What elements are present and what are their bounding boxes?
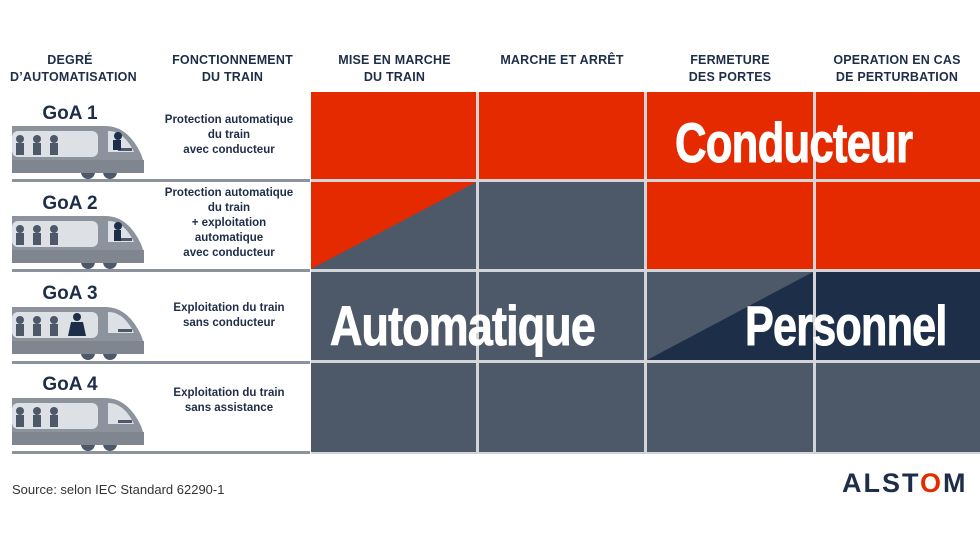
text: Protection automatique <box>165 187 293 199</box>
row separators <box>12 179 310 182</box>
header: operation perturbation <box>833 53 961 84</box>
text: Exploitation du train <box>173 302 285 314</box>
text: sans assistance <box>185 402 273 414</box>
header: marche et arrêt: MARCHE ET ARRÊT <box>500 53 624 67</box>
text: du train <box>208 202 250 214</box>
header: fonctionnement <box>172 53 293 84</box>
text: GoA 2 <box>42 193 98 214</box>
label: Automatique: Automatique <box>330 294 595 357</box>
logo: ALSTOM: ALSTOM <box>842 468 968 498</box>
header: operation perturbation: OPERATION EN CAS <box>833 53 961 67</box>
header: degré d'automatisation: DEGRÉ <box>47 53 93 67</box>
descriptions <box>165 114 293 156</box>
icon: trains <box>12 126 144 451</box>
header: fermeture des portes: DES PORTES <box>689 70 771 84</box>
text: + exploitation <box>192 217 266 229</box>
header: fermeture des portes: FERMETURE <box>690 53 770 67</box>
descriptions: avec conducteur <box>183 144 275 156</box>
header: fonctionnement: DU TRAIN <box>202 70 263 84</box>
header: degré d'automatisation: D’AUTOMATISATION <box>10 70 137 84</box>
label: Personnel: Personnel <box>745 294 947 357</box>
text: avec conducteur <box>183 247 275 259</box>
header: degré d'automatisation <box>10 52 137 84</box>
text: sans conducteur <box>183 317 275 329</box>
header: mise en marche: MISE EN MARCHE <box>338 53 451 67</box>
text: GoA 3 <box>42 283 98 304</box>
text: automatique <box>195 232 263 244</box>
header: mise en marche <box>338 53 451 84</box>
header: operation perturbation: DE PERTURBATION <box>836 70 958 84</box>
GoA labels: GoA 1 <box>42 103 98 124</box>
header: mise en marche: DU TRAIN <box>364 70 425 84</box>
header: fermeture des portes <box>689 53 771 84</box>
source text: Source: selon IEC Standard 62290-1 <box>12 482 224 497</box>
text: Exploitation du train <box>173 387 285 399</box>
descriptions: Protection automatique <box>165 114 293 126</box>
text: GoA 4 <box>42 374 98 395</box>
descriptions: du train <box>208 129 250 141</box>
label: Conducteur: Conducteur <box>675 111 912 174</box>
header: fonctionnement: FONCTIONNEMENT <box>172 53 293 67</box>
